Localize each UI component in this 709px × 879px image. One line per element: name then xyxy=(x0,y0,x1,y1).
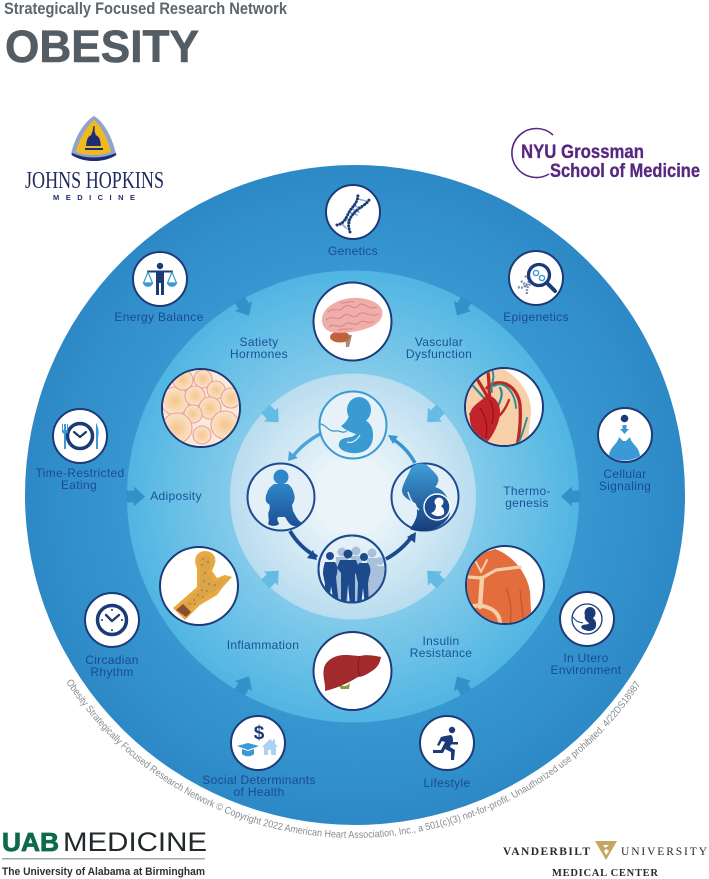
factor: Social Determinants of Health xyxy=(202,716,316,799)
arrow: mother to fetus xyxy=(388,435,415,463)
inner circle: life cycle xyxy=(230,374,476,620)
icon: adipose tissue xyxy=(163,370,239,446)
logo: Vanderbilt University Medical Center: VANDERBILT xyxy=(503,846,590,858)
outer ring: contributing factors xyxy=(25,165,685,825)
factor: Genetics: Genetics xyxy=(328,244,378,258)
stage: adult population xyxy=(318,536,386,606)
factor: Time-Restricted Eating xyxy=(35,409,125,492)
factor: Energy Balance: Energy Balance xyxy=(114,310,204,324)
logo: UAB Medicine: MEDICINE xyxy=(63,827,207,857)
panel: Thermogenesis, muscle: Thermo- xyxy=(503,484,551,498)
factor: Circadian Rhythm xyxy=(85,593,139,679)
panel: Insulin Resistance, liver: Insulin xyxy=(423,634,459,648)
curved copyright line: Obesity Strategically Focused Research Network © Copyright 2022 American Heart Association, Inc., a 501(c)(3) not-for-profit. Unauthorized use prohibited. 4/22DS18987 xyxy=(67,680,640,838)
factor: Energy Balance xyxy=(114,252,204,324)
factor: Lifestyle: Lifestyle xyxy=(424,776,470,790)
panel: Thermogenesis, muscle xyxy=(464,484,551,628)
logo: Vanderbilt University Medical Center: UNIVERSITY xyxy=(621,846,708,858)
icon: fetus in womb xyxy=(572,604,602,634)
panel: Vascular Dysfunction, heart: Dysfunction xyxy=(406,347,472,361)
icon: liver xyxy=(323,655,381,691)
factor: In Utero Environment xyxy=(551,592,622,677)
logo: NYU Grossman School of Medicine xyxy=(512,129,700,182)
logo: UAB Medicine: The University of Alabama at Birmingham xyxy=(2,866,205,878)
panel: Thermogenesis, muscle: genesis xyxy=(505,496,549,510)
logo: Johns Hopkins Medicine: JOHNS HOPKINS xyxy=(25,168,164,194)
factor: Social Determinants of Health: of Health xyxy=(234,785,284,799)
factor: Epigenetics: Epigenetics xyxy=(503,310,569,324)
factor: Circadian Rhythm: Circadian xyxy=(85,653,139,667)
panel: Insulin Resistance, liver xyxy=(314,632,472,710)
logo: Johns Hopkins Medicine: MEDICINE xyxy=(53,193,135,202)
factor: Genetics xyxy=(326,185,380,258)
panel: Inflammation, bone: Inflammation xyxy=(227,638,299,652)
arrow: fetus to baby xyxy=(288,434,320,461)
factor: Time-Restricted Eating: Eating xyxy=(61,478,97,492)
factor: Cellular Signaling: Cellular xyxy=(603,467,647,481)
icon: dollar, graduation cap and house: $ xyxy=(254,723,265,744)
panel: Adiposity, fat cells xyxy=(150,368,242,503)
middle ring: organ systems xyxy=(127,270,579,722)
icon: shoulder muscle xyxy=(467,549,532,623)
icon: cell receiving signal xyxy=(609,415,640,460)
factor: Social Determinants of Health: Social Determinants xyxy=(202,773,316,787)
icon: clock xyxy=(98,606,126,634)
panel: Adiposity, fat cells: Adiposity xyxy=(150,489,202,503)
icon: DNA helix xyxy=(337,194,369,232)
icon: clock with fork and knife xyxy=(62,423,99,449)
factor: In Utero Environment: In Utero xyxy=(563,651,609,665)
panel: Satiety Hormones, brain: Hormones xyxy=(230,347,288,361)
factor: Circadian Rhythm: Rhythm xyxy=(90,665,134,679)
panel: Inflammation, bone xyxy=(160,547,299,652)
factor: Cellular Signaling xyxy=(598,408,652,493)
logo: Vanderbilt University Medical Center: MEDICAL CENTER xyxy=(552,868,658,879)
icon: brain xyxy=(322,298,382,347)
panel: Satiety Hormones, brain: Satiety xyxy=(240,335,278,349)
icon: heart and vessels xyxy=(466,369,531,445)
stage: fetus xyxy=(320,392,386,458)
factor: Epigenetics xyxy=(503,251,569,324)
arrows: middle ring into inner circle xyxy=(258,402,448,591)
logo: NYU Grossman School of Medicine: NYU Grossman xyxy=(521,142,644,163)
icon: femur bone xyxy=(173,551,232,620)
stage: baby xyxy=(248,464,314,530)
panel: Vascular Dysfunction, heart xyxy=(406,335,543,450)
icon: person with scales xyxy=(143,263,177,295)
arrow: baby to people xyxy=(290,531,317,560)
arrow: people to mother xyxy=(386,532,416,559)
concentric circle diagram xyxy=(25,165,685,825)
factor: Lifestyle xyxy=(420,716,474,790)
logo: UAB Medicine xyxy=(2,827,207,878)
arrows: outer ring into middle ring xyxy=(126,294,580,698)
icon: magnifier over DNA xyxy=(518,264,555,294)
stage: pregnant mother xyxy=(392,463,458,531)
factor: Time-Restricted Eating: Time-Restricted xyxy=(35,466,125,480)
header title block xyxy=(4,0,287,72)
panel: Satiety Hormones, brain xyxy=(230,282,392,361)
icon: runner xyxy=(433,727,458,760)
life cycle diagram xyxy=(248,392,458,606)
title: OBESITY xyxy=(5,21,199,72)
logo: UAB Medicine: UAB xyxy=(2,827,59,857)
panel: Vascular Dysfunction, heart: Vascular xyxy=(415,335,463,349)
factor: Cellular Signaling: Signaling xyxy=(599,479,651,493)
factor: In Utero Environment: Environment xyxy=(551,663,622,677)
logo: Vanderbilt University Medical Center xyxy=(503,841,708,879)
logo: Johns Hopkins Medicine xyxy=(25,116,164,202)
panel: Insulin Resistance, liver: Resistance xyxy=(410,646,472,660)
